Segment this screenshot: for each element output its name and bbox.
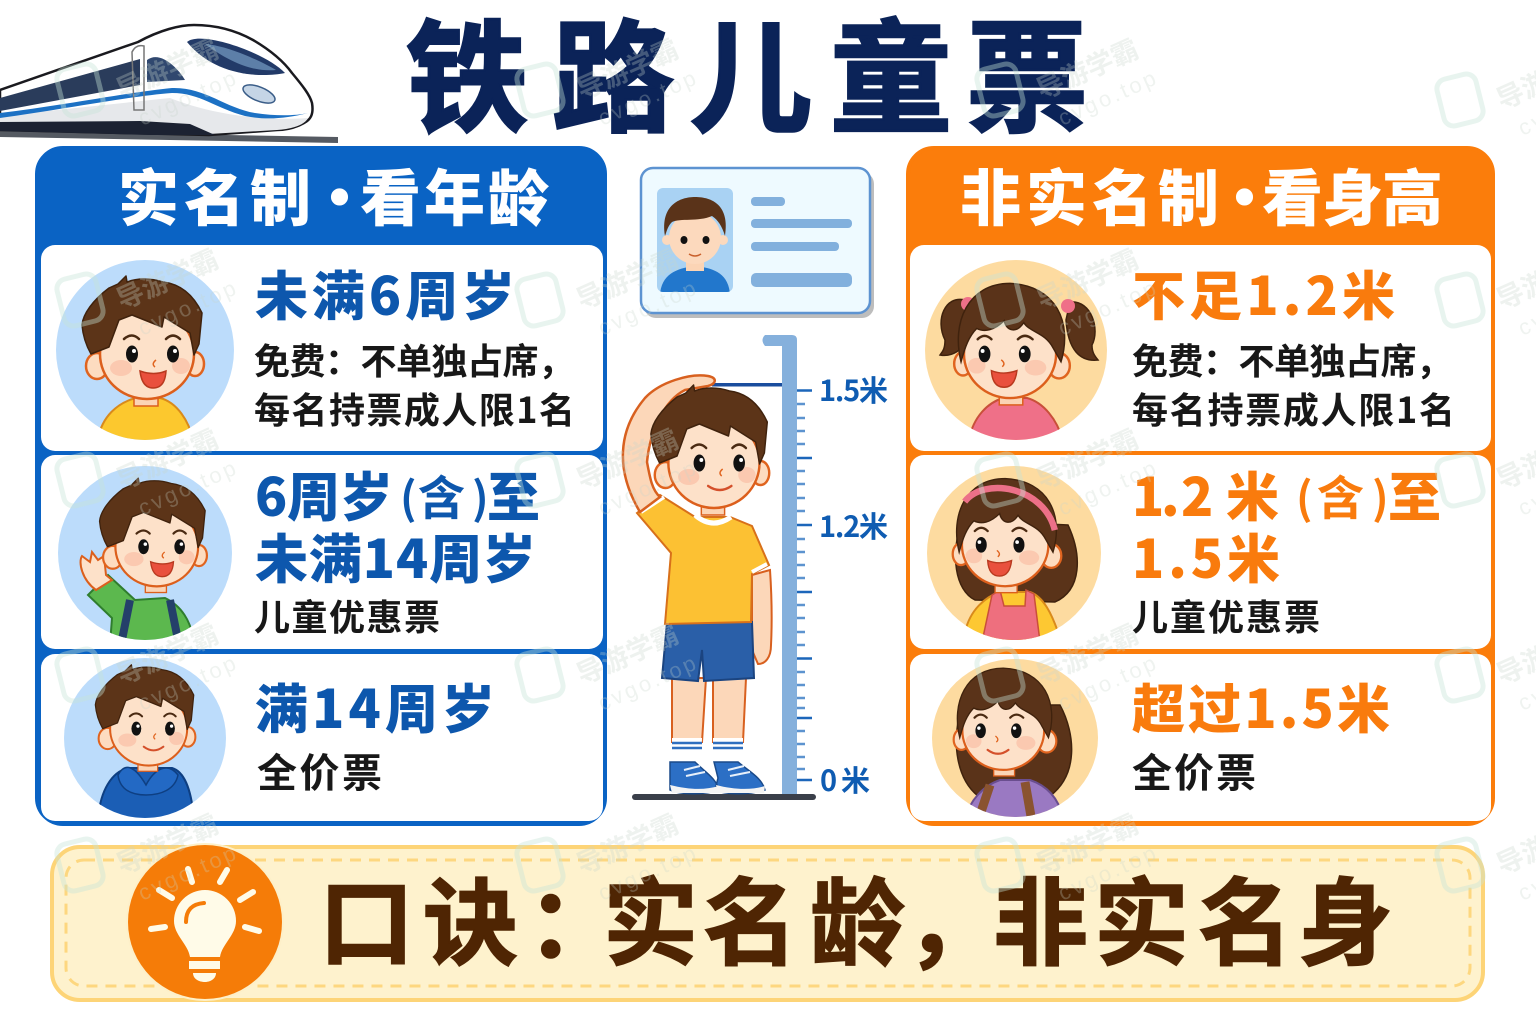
card heading: 含: [418, 460, 465, 529]
long hair: [956, 705, 1072, 796]
train body: [0, 25, 313, 135]
height ruler: [712, 335, 888, 800]
t-shirt: [637, 495, 769, 624]
panel heading: 实名制·看年龄: [118, 149, 549, 238]
card heading: [1132, 456, 1441, 532]
blue stripe: [0, 88, 308, 118]
head: [651, 385, 769, 515]
avatar: girl with backpack: [932, 659, 1098, 822]
back arm: [752, 570, 772, 664]
card: 6 to 14: [41, 455, 603, 649]
card heading: ): [1372, 463, 1389, 527]
rail: [0, 131, 338, 143]
ID photo: [657, 188, 733, 294]
icon: light bulb: [126, 843, 284, 1001]
avatar: boy with yellow shirt: [56, 260, 234, 445]
panel heading: 非实名制·看身高: [960, 149, 1443, 238]
card: under 1.2m: 每名持票成人限1名: [1132, 382, 1455, 434]
card description: 儿童优惠票: [1132, 589, 1320, 641]
shoes: [670, 762, 765, 794]
card description: 儿童优惠票: [254, 589, 440, 641]
card heading: 6周岁: [255, 456, 393, 532]
banner background: [52, 847, 1483, 1000]
pigtails: [940, 299, 1098, 360]
socks: [672, 738, 743, 768]
card: 14 and over: [41, 654, 603, 821]
ground line: [632, 794, 816, 800]
height marker line: [712, 383, 782, 386]
raised arm: [623, 375, 715, 512]
ruler body: [762, 335, 797, 794]
card heading: 未满6周岁: [255, 255, 515, 331]
card heading: [255, 456, 540, 532]
height ruler: 0米: [820, 758, 870, 800]
card heading: 1.2米: [1132, 456, 1279, 532]
train illustration: [0, 25, 338, 143]
avatar: waving boy with green shirt: [58, 466, 232, 645]
ruler ticks: [797, 390, 812, 780]
avatar: boy with blue hoodie: [64, 658, 226, 820]
panel frame: [37, 148, 605, 824]
ID text lines: [751, 197, 852, 287]
card heading: (: [400, 463, 417, 527]
card description: 免费：不单独占席，: [1132, 333, 1452, 385]
legs: [672, 678, 746, 742]
icon: ID card: [641, 168, 874, 318]
card heading: 至: [1388, 456, 1441, 532]
train windows: [0, 59, 140, 111]
windshield: [187, 39, 285, 75]
panel: real-name, by age: [37, 148, 605, 824]
banner: mnemonic: [52, 843, 1483, 1001]
card: under 1.2m: [910, 245, 1491, 451]
card heading: 满14周岁: [255, 668, 495, 744]
card: 1.2m to 1.5m: 1.5米: [1132, 518, 1280, 594]
card heading: ): [472, 463, 489, 527]
avatar: girl with pigtails: [925, 260, 1107, 445]
card heading: 含: [1317, 460, 1364, 529]
child measuring height: [623, 375, 772, 794]
card heading: 不足1.2米: [1132, 255, 1395, 331]
card heading: 超过1.5米: [1132, 668, 1390, 744]
card: under 6: [41, 245, 603, 451]
mnemonic text: 口诀：实名龄，非实名身: [319, 848, 1393, 985]
card: over 1.5m: [910, 654, 1491, 822]
card heading: (: [1296, 463, 1313, 527]
card: under 6: 每名持票成人限1名: [254, 382, 575, 434]
dashed stitching: [66, 860, 1470, 986]
panel frame: [908, 148, 1493, 824]
card description: 全价票: [1132, 741, 1256, 799]
long hair: [956, 520, 1077, 602]
card: 6 to 14: 未满14周岁: [255, 518, 536, 594]
card description: 免费：不单独占席，: [254, 333, 574, 385]
panel: non real-name, by height: [908, 148, 1493, 824]
card: 1.2m to 1.5m: [910, 455, 1491, 649]
height ruler: 1.2米: [819, 504, 888, 546]
headlight: [241, 81, 277, 107]
card heading: 至: [487, 456, 540, 532]
avatar: girl with headband: [927, 466, 1101, 642]
ruler labels: 1.5米: [819, 368, 888, 410]
shorts: [662, 622, 754, 681]
card description: 全价票: [257, 741, 382, 799]
